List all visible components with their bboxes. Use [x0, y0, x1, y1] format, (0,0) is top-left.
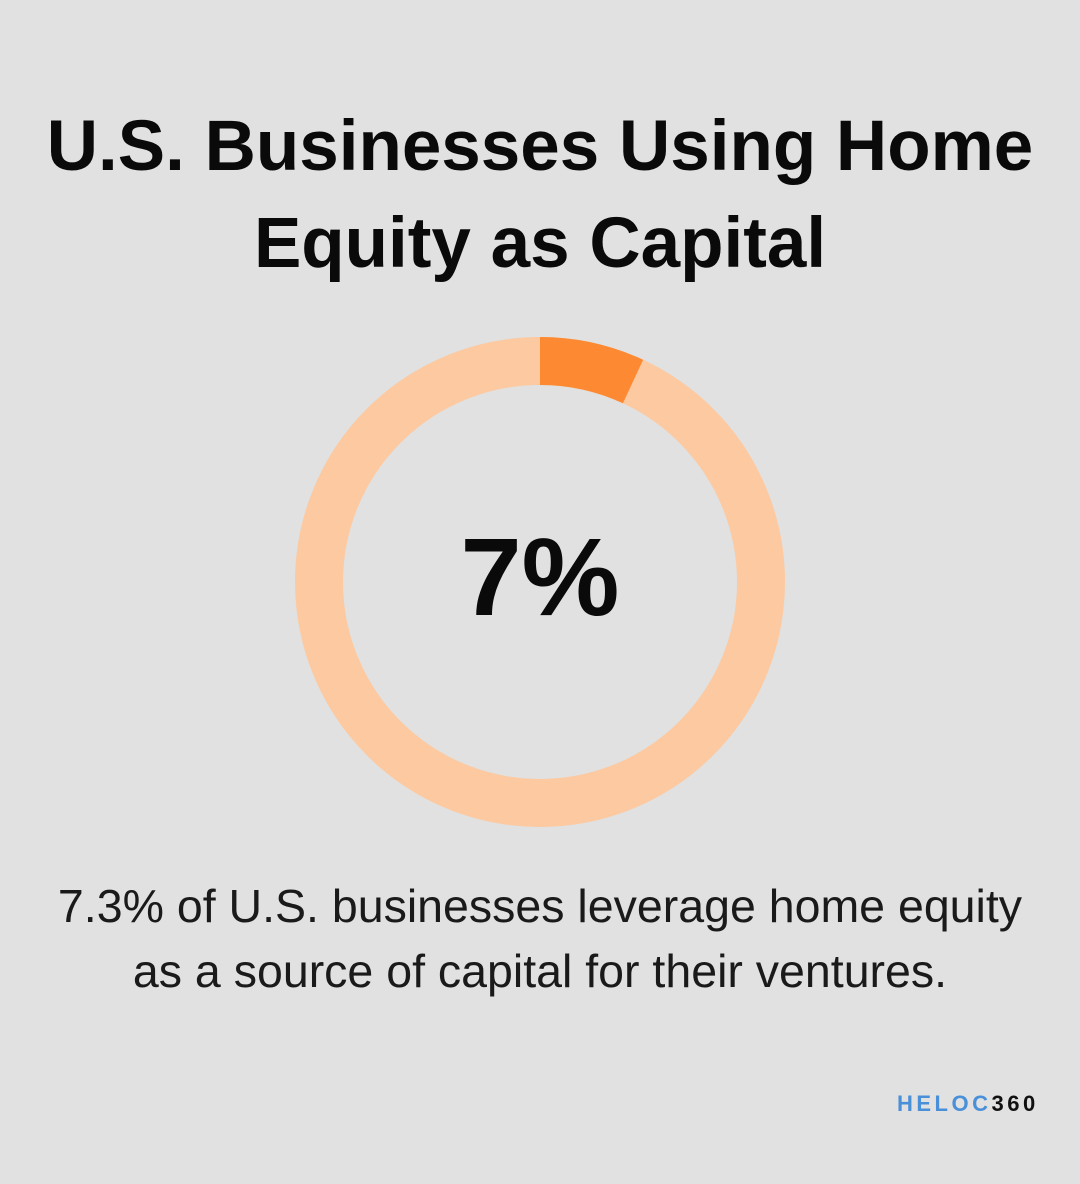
description text — [58, 880, 1022, 997]
title: U.S. Businesses Using Home — [47, 107, 1033, 186]
title: Equity as Capital — [254, 204, 826, 283]
logo: HELOC360 — [897, 1091, 1039, 1116]
description text: as a source of capital for their ventures. — [133, 945, 947, 997]
description text: 7.3% of U.S. businesses leverage home equity — [58, 880, 1022, 932]
donut chart: 7% — [461, 516, 619, 639]
title — [47, 107, 1033, 283]
